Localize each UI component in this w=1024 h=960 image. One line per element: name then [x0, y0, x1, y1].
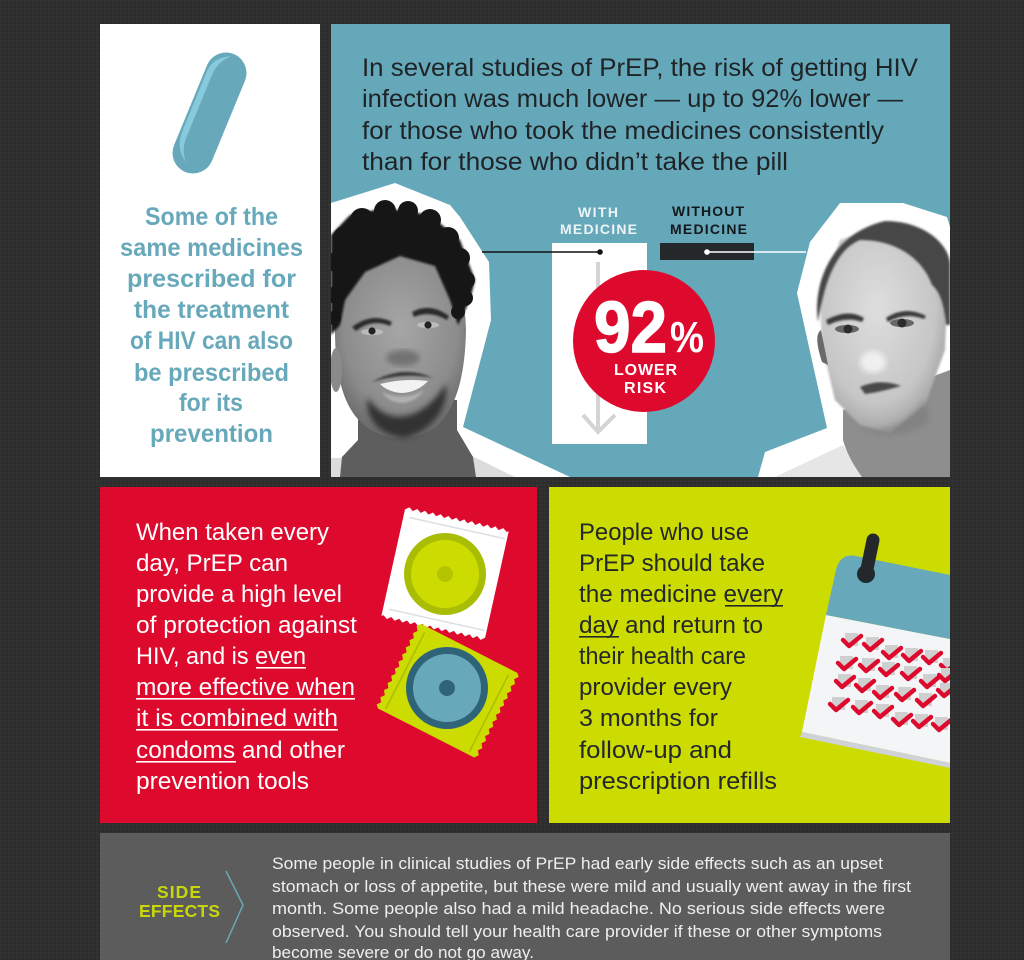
bar: without medicine: MEDICINE: [670, 221, 747, 237]
text: every day and refills: provider every: [579, 674, 732, 701]
text: every day and refills: People who use: [579, 519, 749, 546]
text: side effects description: observed. You should tell your health care provider if these or other symptoms: [272, 922, 882, 941]
heading: same medicines: [120, 203, 303, 448]
text: study summary: [362, 54, 918, 176]
heading: same medicines: prevention: [150, 420, 273, 448]
text: high level of protection: provide a high level: [136, 581, 342, 608]
callout: 92% lower risk: RISK: [624, 380, 666, 397]
heading: same medicines: Some of the: [145, 203, 278, 231]
text: every day and refills: their health care: [579, 643, 746, 670]
panel: PrEP studies: [327, 24, 950, 477]
arrow: chevron: [226, 871, 243, 943]
text: every day and refills: prescription refills: [579, 768, 777, 795]
text: high level of protection: condoms and other: [136, 737, 345, 764]
heading: same medicines: be prescribed: [134, 359, 289, 387]
text: every day and refills: [579, 519, 783, 795]
text: high level of protection: HIV, and is even: [136, 643, 306, 670]
heading: same medicines: of HIV can also: [130, 327, 293, 355]
text: every day and refills: PrEP should take: [579, 550, 765, 577]
photo: man serious: [758, 203, 950, 477]
text: every day and refills: 3 months for: [579, 705, 718, 732]
text: high level of protection: When taken every: [136, 519, 329, 546]
bar: with medicine: [482, 204, 647, 444]
text: study summary: In several studies of PrEP, the risk of getting HIV: [362, 54, 918, 82]
text: every day and refills: day and return to: [579, 612, 763, 639]
text: high level of protection: of protection against: [136, 612, 357, 639]
callout: 92% lower risk: LOWER: [614, 362, 677, 379]
heading: same medicines: prescribed for: [127, 265, 296, 293]
icon: condom packets: [375, 506, 520, 759]
text: side effects description: stomach or loss of appetite, but these were mild and usually went away in the first: [272, 877, 911, 896]
icon: pill: [180, 56, 231, 162]
callout: 92% lower risk: 92: [594, 288, 667, 368]
photo: man smiling: [327, 183, 570, 477]
heading: side effects: [139, 882, 220, 921]
bar: without medicine: [660, 203, 806, 260]
text: side effects description: month. Some people also had a mild headache. No serious side effects were: [272, 899, 885, 918]
bar: with medicine: WITH: [578, 204, 618, 220]
heading: same medicines: for its: [179, 389, 243, 417]
heading: same medicines: the treatment: [134, 296, 290, 324]
text: study summary: than for those who didn’t take the pill: [362, 148, 788, 176]
panel: medicines for prevention: [100, 24, 320, 477]
text: study summary: infection was much lower — up to 92% lower —: [362, 85, 903, 113]
bar: with medicine: MEDICINE: [560, 221, 637, 237]
text: study summary: for those who took the medicines consistently: [362, 117, 885, 145]
panel: daily use: [549, 487, 960, 823]
heading: side effects: EFFECTS: [139, 901, 220, 921]
text: every day and refills: the medicine every: [579, 581, 783, 608]
text: high level of protection: it is combined with: [136, 705, 338, 732]
heading: same medicines: same medicines: [120, 234, 303, 262]
callout: 92% lower risk: %: [670, 313, 704, 362]
panel: protection: [100, 487, 537, 823]
panel: side effects: [100, 833, 950, 960]
text: high level of protection: prevention tools: [136, 768, 309, 795]
bar: without medicine: WITHOUT: [672, 203, 744, 219]
text: every day and refills: follow-up and: [579, 737, 732, 764]
heading: side effects: SIDE: [157, 882, 201, 902]
callout: 92% lower risk: [573, 270, 715, 412]
text: side effects description: [272, 854, 911, 960]
text: high level of protection: day, PrEP can: [136, 550, 288, 577]
text: high level of protection: more effective when: [136, 674, 355, 701]
icon: calendar: [800, 540, 960, 770]
text: high level of protection: [136, 519, 357, 795]
text: side effects description: Some people in clinical studies of PrEP had early side effects such as an upset: [272, 854, 883, 873]
